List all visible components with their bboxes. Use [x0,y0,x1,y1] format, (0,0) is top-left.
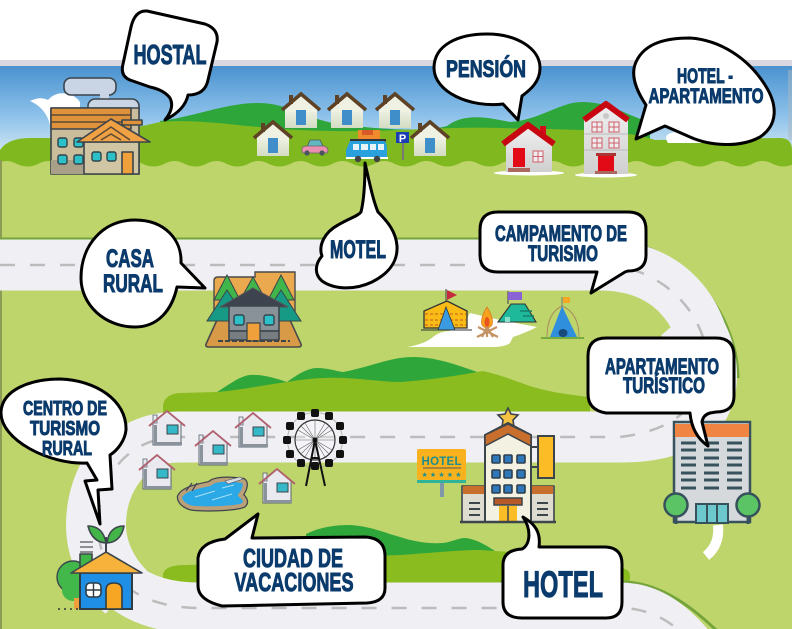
icon: holiday village houses [139,411,295,503]
icon: hotel building [460,408,556,522]
icon: motel houses [254,94,449,156]
callout: pensión [434,34,540,120]
callout: hotel-apartamento [634,38,774,145]
callout: campamento de turismo: CAMPAMENTO DE [495,221,627,246]
callout: ciudad de vacaciones: CIUDAD DE [243,543,343,573]
callout: centro de turismo rural: RURAL [42,438,92,460]
icon: red roof apartment hotel [575,104,637,178]
callout: casa rural: CASA [106,245,154,273]
callout: motel [316,163,397,288]
icon: hotel billboard: HOTEL [422,456,462,468]
callout: hotel-apartamento: HOTEL - [677,65,733,88]
icon: hotel billboard: ★★★★★ [422,471,462,479]
callout: motel: MOTEL [330,236,386,264]
icon: hotel billboard [417,449,466,497]
callout: apartamento turístico [588,338,734,446]
icon: red roof house [494,125,564,176]
callout: campamento de turismo: TURISMO [528,241,598,266]
icon: pink car [302,140,328,156]
icon: hostal building [51,78,150,174]
callout: centro de turismo rural: TURISMO [30,418,100,440]
callout: ciudad de vacaciones [198,514,385,606]
callout: pensión: PENSIÓN [446,55,526,83]
callout: centro de turismo rural [1,379,126,524]
callout: hostal [122,11,217,120]
icon: swimming pool [180,477,245,508]
winding road [0,265,708,629]
road green edges [0,239,738,629]
icon: parking sign: P [399,133,406,145]
callout: apartamento turístico: TURÍSTICO [623,373,705,398]
callout: ciudad de vacaciones: VACACIONES [234,567,354,597]
hills behind roads [163,357,630,588]
callout: hotel: HOTEL [523,564,603,605]
callout: casa rural: RURAL [103,270,163,298]
icon: parking sign [396,132,409,160]
callout: hotel [503,517,622,618]
icon: ferris wheel [283,409,347,486]
icon: campsite tents and fire [407,289,584,347]
icon: rural tourism house with sprout [57,526,142,609]
callout: apartamento turístico: APARTAMENTO [605,354,719,379]
callout: campamento de turismo [480,212,646,293]
icon: blue bus with luggage [346,130,388,162]
callout: casa rural [81,220,205,327]
icon: rural house among trees [206,272,301,347]
callout: centro de turismo rural: CENTRO DE [23,398,107,420]
callout: hostal: HOSTAL [134,39,206,70]
icon: tourist apartment tower [664,422,760,556]
